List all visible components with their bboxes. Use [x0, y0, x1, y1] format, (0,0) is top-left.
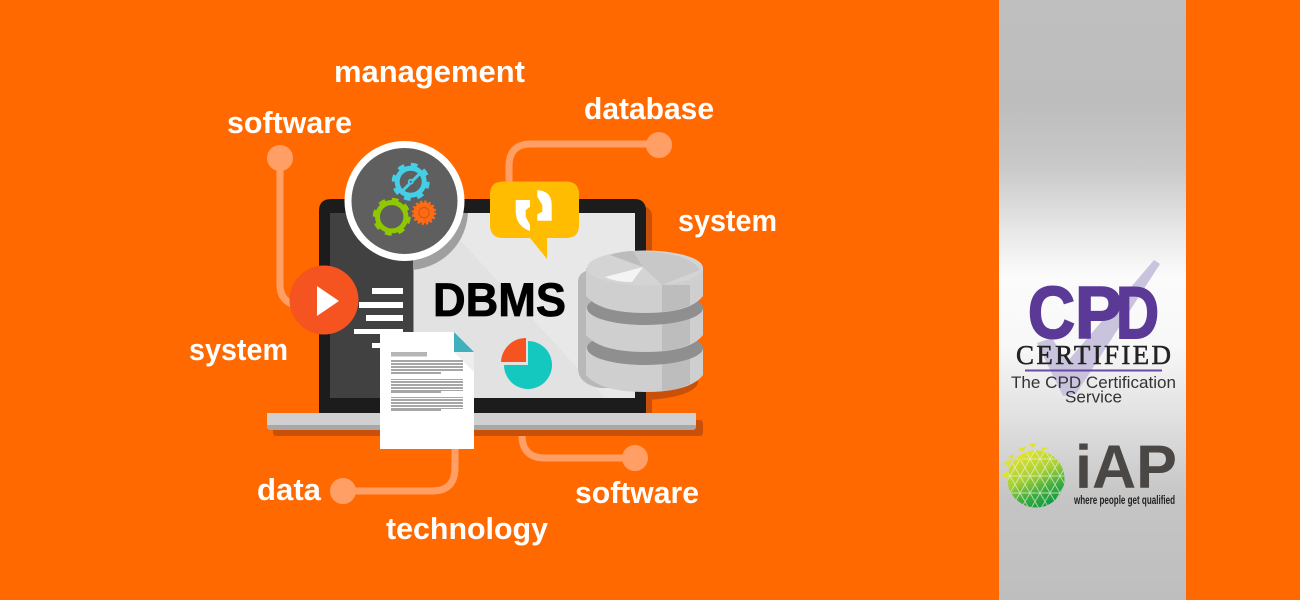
icon: green gear	[375, 200, 408, 233]
connector: software bottom	[522, 428, 644, 468]
menu lines	[354, 288, 403, 348]
label: management: management	[334, 54, 525, 89]
logo: iAP: iAP	[1075, 433, 1177, 501]
label: system right: system	[678, 203, 777, 238]
icon: pie chart	[501, 338, 552, 389]
logo: iAP: where people get qualified	[1073, 495, 1175, 507]
label: database: database	[584, 91, 714, 126]
logo: CPD certified: CERTIFIED	[1016, 340, 1171, 370]
logo: iAP	[1002, 433, 1177, 508]
icon: blue gear	[394, 165, 427, 198]
connector: software top	[270, 148, 298, 306]
logo: CPD certified: C	[1028, 273, 1075, 354]
label: software top: software	[227, 105, 352, 140]
icon: gears badge	[348, 144, 468, 270]
logo: CPD certified: P	[1075, 273, 1122, 354]
icon: orange gear	[413, 202, 435, 224]
heading: DBMS: DBMS	[433, 273, 566, 326]
icon: iAP sphere	[1002, 443, 1064, 508]
logo: CPD certified: D	[1116, 273, 1159, 354]
certification band	[999, 0, 1186, 600]
icon: database	[578, 250, 703, 400]
label: system left: system	[189, 332, 288, 367]
label: data: data	[257, 472, 322, 507]
connector: data	[334, 445, 455, 500]
icon: play button	[290, 266, 358, 334]
icon: document	[380, 332, 474, 449]
logo: CPD certified: Service	[1065, 388, 1122, 406]
label: technology: technology	[386, 511, 549, 546]
connector: database	[509, 136, 668, 186]
laptop	[267, 199, 703, 436]
label: software bottom: software	[575, 475, 699, 510]
logo: CPD certified	[1011, 260, 1176, 406]
logo: CPD certified: The CPD Certification	[1011, 373, 1176, 392]
icon: speech bubble	[490, 182, 579, 259]
